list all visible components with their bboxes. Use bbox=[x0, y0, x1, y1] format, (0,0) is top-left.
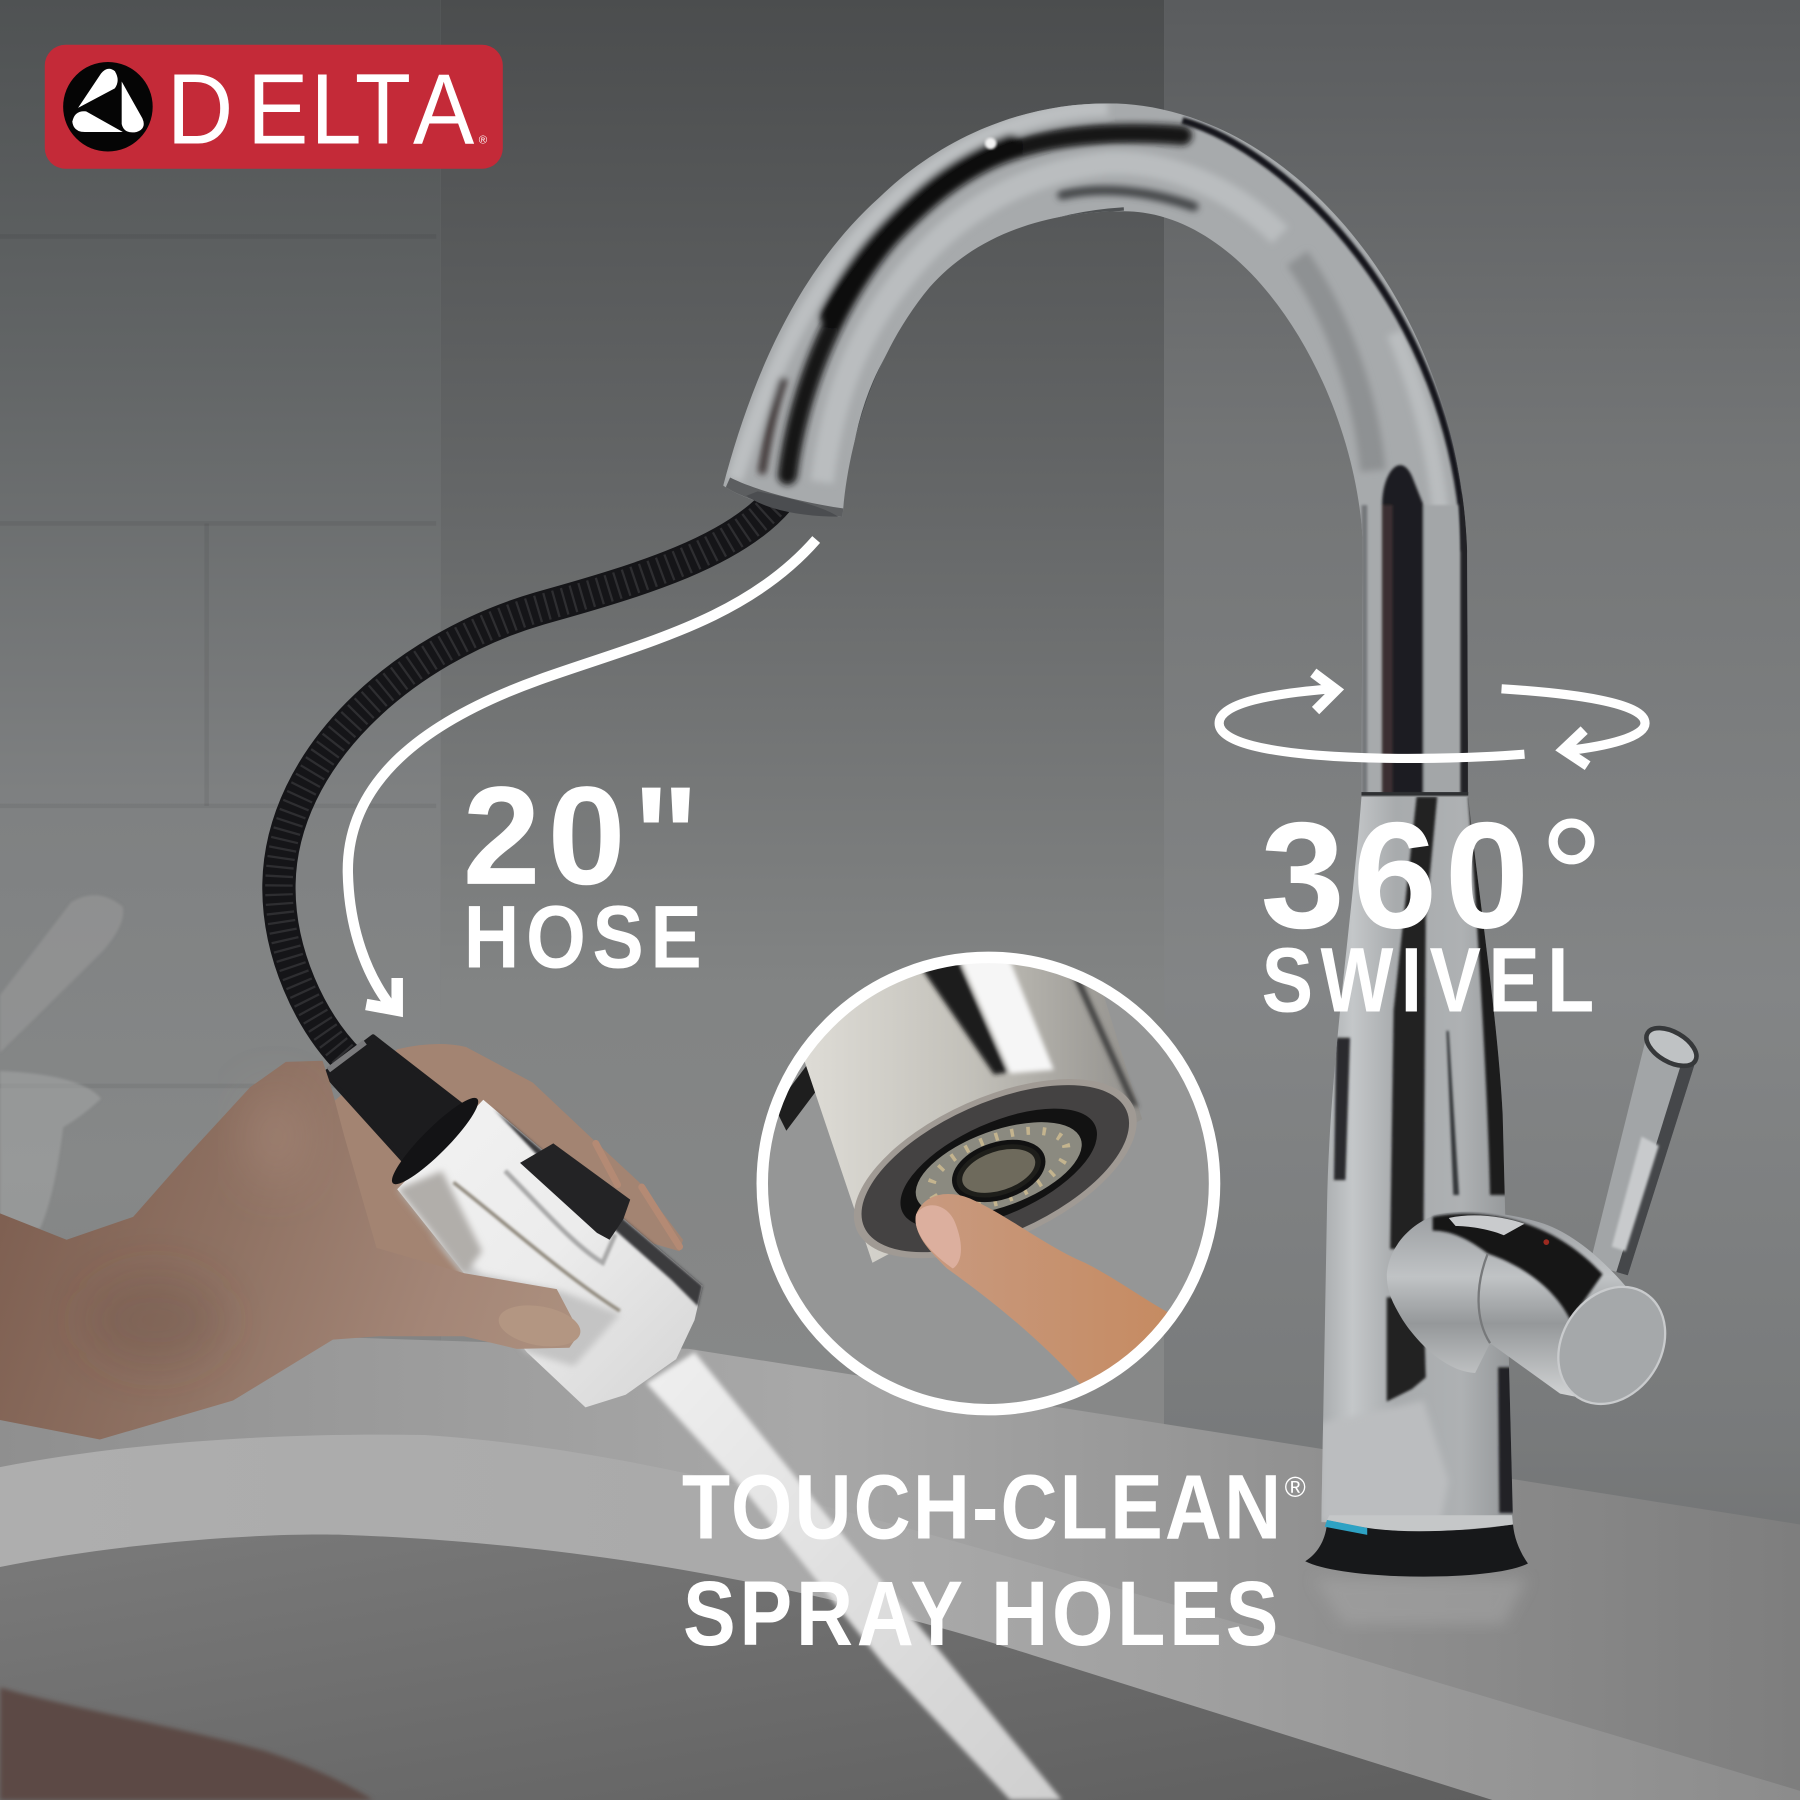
registered mark: ® bbox=[1285, 1472, 1306, 1504]
counter top bbox=[0, 1326, 1800, 1800]
utensil in background bbox=[0, 895, 123, 1053]
faucet reflection on counter bbox=[1314, 1578, 1527, 1624]
sink basin bbox=[0, 1535, 1492, 1800]
hose bbox=[279, 499, 778, 1062]
label: 20 inch hose: HOSE bbox=[464, 886, 702, 987]
small hose stub bbox=[778, 1066, 815, 1131]
sprayer button bbox=[520, 1143, 630, 1240]
handle hub bbox=[1387, 1212, 1687, 1424]
callout: touch-clean circle inset bbox=[762, 941, 1215, 1410]
label: 20 inch hose bbox=[463, 757, 702, 987]
pull-down sprayer bbox=[325, 1037, 703, 1407]
connector metal ring bbox=[328, 1042, 365, 1070]
lower body bbox=[1322, 796, 1513, 1522]
sprayer body bbox=[397, 1100, 703, 1407]
label: touch-clean spray holes: TOUCH-CLEAN bbox=[682, 1456, 1281, 1559]
registered mark: ® bbox=[479, 134, 488, 146]
label: touch-clean spray holes bbox=[682, 1456, 1306, 1665]
logo wordmark: DELTA bbox=[167, 54, 474, 165]
inset sprayer close-up bbox=[778, 963, 1168, 1384]
hand and thumb bbox=[0, 1061, 584, 1440]
fingers behind sprayer bbox=[333, 1044, 683, 1274]
finger bbox=[916, 1194, 1182, 1389]
label: 360 degree swivel: 360 bbox=[1260, 792, 1529, 961]
sink lip bbox=[0, 1435, 1800, 1800]
water stream bbox=[646, 1352, 1062, 1800]
thumb nail bbox=[495, 1299, 584, 1352]
handle lever bbox=[1590, 1020, 1703, 1275]
arrows: swivel rotation bbox=[1219, 673, 1645, 766]
logo icon bbox=[63, 62, 153, 152]
gooseneck spout bbox=[723, 104, 1468, 792]
base with touch indicator bbox=[1305, 1515, 1528, 1577]
sprayer button frame bbox=[505, 1171, 615, 1263]
person's other hand, bottom left bbox=[0, 1688, 373, 1800]
swivel collar line bbox=[1361, 792, 1468, 796]
spout opening bbox=[746, 491, 838, 517]
black washer bbox=[384, 1090, 486, 1192]
label: 20 inch hose: 20" bbox=[463, 757, 699, 914]
degree symbol bbox=[1553, 823, 1590, 860]
spray holes ring bbox=[928, 1126, 1070, 1206]
logo: Delta badge bbox=[45, 45, 503, 169]
arrow: hose length bbox=[348, 540, 816, 1010]
label: touch-clean spray holes: SPRAY HOLES bbox=[683, 1562, 1278, 1665]
label: 360 degree swivel: SWIVEL bbox=[1262, 928, 1594, 1031]
hose connector bbox=[325, 1037, 465, 1169]
glass bowl in background bbox=[0, 1071, 101, 1231]
label: 360 degree swivel bbox=[1260, 792, 1594, 1031]
faucet bbox=[689, 92, 1703, 1577]
